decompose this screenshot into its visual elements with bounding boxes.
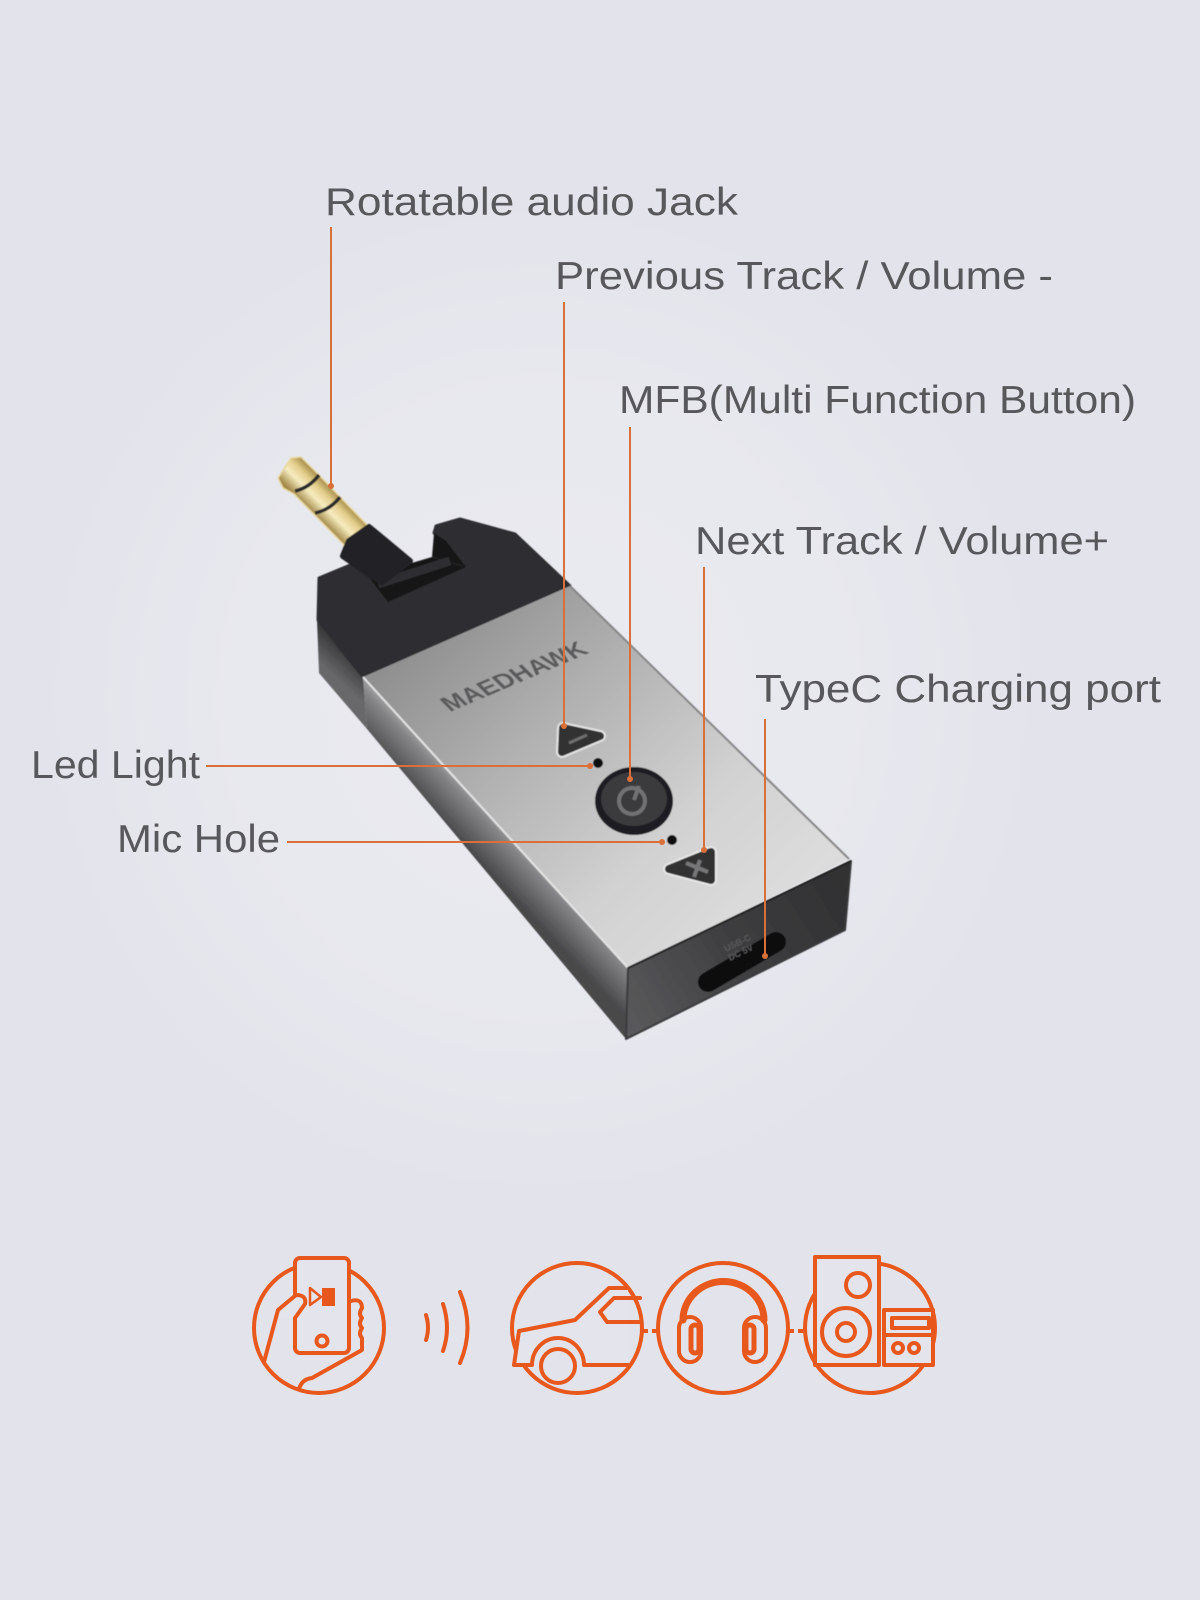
volume down button: [562, 728, 600, 752]
connector dashes: [642, 1329, 805, 1333]
icon: speaker and stereo: [805, 1257, 935, 1393]
callout: type-c charging port: [755, 668, 1161, 959]
icon: phone in hand: [254, 1258, 384, 1393]
callout: previous track / volume: [555, 255, 1053, 729]
usb-c port: [708, 932, 776, 982]
callout: multi function button: [619, 379, 1136, 782]
callout: next track / volume: [695, 520, 1109, 853]
callout: type-c charging port: TypeC Charging port: [755, 668, 1161, 711]
silver body side: [363, 677, 628, 1039]
callout: next track / volume: Next Track / Volume+: [695, 520, 1109, 563]
silver top panel: [363, 586, 849, 968]
usb-c port: USB-C: [722, 932, 753, 954]
callout: multi function button: MFB(Multi Function Button): [619, 379, 1136, 422]
callout: mic hole: [117, 818, 665, 861]
callout: mic hole: Mic Hole: [117, 818, 280, 861]
led hole: [593, 758, 603, 768]
mic hole: [667, 835, 677, 845]
brand logo: MAEDHAWK: [435, 637, 595, 716]
callout: led light: Led Light: [31, 744, 200, 787]
callout: rotatable audio jack: Rotatable audio Jack: [325, 181, 739, 224]
front face: [626, 861, 851, 1039]
callout: led light: [31, 744, 593, 787]
product: audio adapter device: [278, 457, 851, 1039]
icon: car: [512, 1263, 642, 1393]
volume up button: [669, 852, 711, 880]
callout: previous track / volume: Previous Track / Volume -: [555, 255, 1053, 298]
icon: headphones: [658, 1263, 788, 1393]
multi function button: [595, 767, 673, 835]
icon: wireless signal waves: [426, 1292, 468, 1363]
usb-c port: DC 5V: [726, 942, 755, 963]
audio jack plug: [278, 457, 410, 582]
callout: rotatable audio jack: [325, 181, 739, 489]
dark plug housing: [317, 519, 570, 729]
